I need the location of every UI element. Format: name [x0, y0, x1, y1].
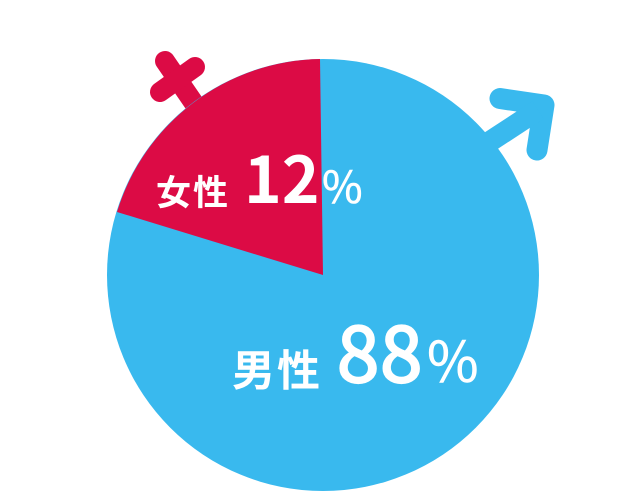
label: male 88%: %	[427, 318, 479, 399]
icon: male arrow	[480, 98, 544, 150]
label: female 12%: 女性	[156, 165, 230, 216]
male slice 88%	[107, 59, 539, 491]
label: female 12%: 12	[244, 130, 320, 222]
label: female 12%: %	[322, 152, 363, 216]
label: female 12%	[156, 130, 363, 222]
label: male 88%	[232, 294, 479, 404]
label: male 88%: 男性	[232, 337, 322, 399]
icon: female cross	[160, 61, 200, 112]
label: male 88%: 88	[337, 294, 423, 404]
female slice 12%	[117, 59, 323, 275]
